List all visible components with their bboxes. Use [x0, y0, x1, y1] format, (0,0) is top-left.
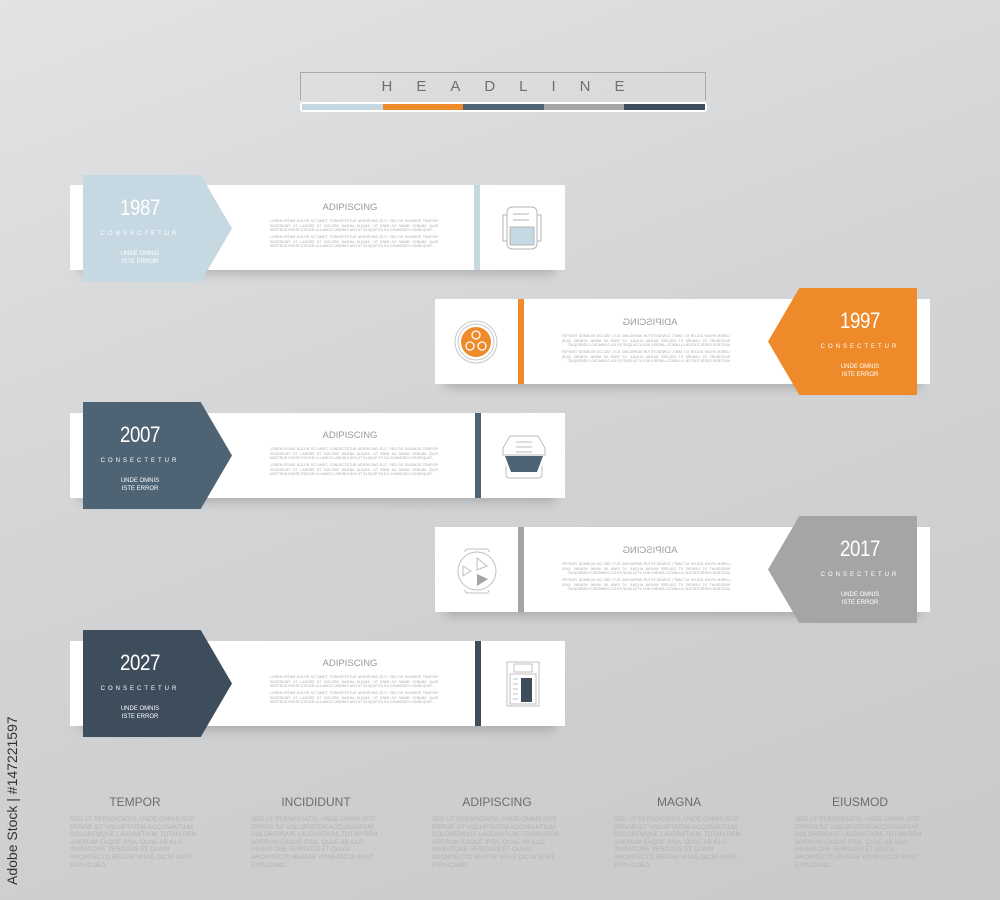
- tag 1997: UNDE OMNIS: [841, 364, 879, 370]
- text block mirrored: LOREM IPSUM DOLOR SIT AMET, CONSECTETUR ADIPISCING ELIT, SED DO EIUSMOD TEMPOR INCIDIDUNT UT LABORE ET DOLORE MAGNA ALIQUA. UT ENIM AD MINIM VENIAM, QUIS NOSTRUD EXERCITATION ULLAMCO LABORIS NISI UT ALIQUIP EX EA COMMODO CONSEQUAT.: [562, 334, 730, 347]
- tag 2007: [83, 402, 232, 509]
- bottom column: INCIDIDUNT: INCIDIDUNT: [281, 795, 351, 809]
- bottom column: ADIPISCING: ADIPISCING: [462, 795, 532, 809]
- tag 2027: [83, 630, 232, 737]
- text block mirrored: LOREM IPSUM DOLOR SIT AMET, CONSECTETUR ADIPISCING ELIT, SED DO EIUSMOD TEMPOR INCIDIDUNT UT LABORE ET DOLORE MAGNA ALIQUA. UT ENIM AD MINIM VENIAM, QUIS NOSTRUD EXERCITATION ULLAMCO LABORIS NISI UT ALIQUIP EX EA COMMODO CONSEQUAT.: [562, 578, 730, 591]
- text block mirrored: LOREM IPSUM DOLOR SIT AMET, CONSECTETUR ADIPISCING ELIT, SED DO EIUSMOD TEMPOR INCIDIDUNT UT LABORE ET DOLORE MAGNA ALIQUA. UT ENIM AD MINIM VENIAM, QUIS NOSTRUD EXERCITATION ULLAMCO LABORIS NISI UT ALIQUIP EX EA COMMODO CONSEQUAT.: [562, 562, 730, 575]
- tag 1987: UNDE OMNIS: [121, 251, 159, 257]
- tag 1997: [768, 288, 917, 395]
- icon: printer: [502, 206, 542, 250]
- bottom column: ADIPISCING: SED UT PERSPICIATIS, UNDE OMNIS ISTE ERROR SIT VOLUPTATEM ACCUSANTIUM DOLOREMQUE LAUDANTIUM, TOTAM REM APERIAM EAQUE IPSA, QUAE AB ILLO INVENTORE VERITATIS ET QUASI ARCHITECTO BEATAE VITAE DICTA SUNT, EXPLICABO.: [432, 816, 559, 869]
- icon: box: [502, 436, 546, 478]
- tag 2007: UNDE OMNIS: [121, 478, 159, 484]
- text block: ADIPISCING: [323, 658, 377, 669]
- text block: [270, 430, 438, 476]
- row 2017: [435, 516, 930, 623]
- headline: [300, 72, 707, 112]
- tag 1987: [83, 175, 232, 282]
- row 2027: [70, 630, 565, 737]
- bottom column: TEMPOR: TEMPOR: [109, 795, 161, 809]
- text block: LOREM IPSUM DOLOR SIT AMET, CONSECTETUR ADIPISCING ELIT, SED DO EIUSMOD TEMPOR INCIDIDUNT UT LABORE ET DOLORE MAGNA ALIQUA. UT ENIM AD MINIM VENIAM, QUIS NOSTRUD EXERCITATION ULLAMCO LABORIS NISI UT ALIQUIP EX EA COMMODO CONSEQUAT.: [270, 691, 438, 704]
- text block: ADIPISCING: [323, 430, 377, 441]
- text block: LOREM IPSUM DOLOR SIT AMET, CONSECTETUR ADIPISCING ELIT, SED DO EIUSMOD TEMPOR INCIDIDUNT UT LABORE ET DOLORE MAGNA ALIQUA. UT ENIM AD MINIM VENIAM, QUIS NOSTRUD EXERCITATION ULLAMCO LABORIS NISI UT ALIQUIP EX EA COMMODO CONSEQUAT.: [270, 219, 438, 232]
- bottom column: MAGNA: SED UT PERSPICIATIS, UNDE OMNIS ISTE ERROR SIT VOLUPTATEM ACCUSANTIUM DOLOREMQUE LAUDANTIUM, TOTAM REM APERIAM EAQUE IPSA, QUAE AB ILLO INVENTORE VERITATIS ET QUASI ARCHITECTO BEATAE VITAE DICTA SUNT, EXPLICABO.: [614, 816, 741, 869]
- text block: LOREM IPSUM DOLOR SIT AMET, CONSECTETUR ADIPISCING ELIT, SED DO EIUSMOD TEMPOR INCIDIDUNT UT LABORE ET DOLORE MAGNA ALIQUA. UT ENIM AD MINIM VENIAM, QUIS NOSTRUD EXERCITATION ULLAMCO LABORIS NISI UT ALIQUIP EX EA COMMODO CONSEQUAT.: [270, 235, 438, 248]
- bottom column: MAGNA: MAGNA: [657, 795, 701, 809]
- tag 2017: UNDE OMNIS: [841, 592, 879, 598]
- icon: clock pie: [458, 548, 496, 594]
- bottom column: EIUSMOD: EIUSMOD: [832, 795, 888, 809]
- watermark id: Adobe Stock | #147221597: [4, 716, 20, 885]
- text block mirrored: ADIPISCING: [623, 317, 677, 328]
- bottom column: EIUSMOD: SED UT PERSPICIATIS, UNDE OMNIS ISTE ERROR SIT VOLUPTATEM ACCUSANTIUM DOLOREMQUE LAUDANTIUM, TOTAM REM APERIAM EAQUE IPSA, QUAE AB ILLO INVENTORE VERITATIS ET QUASI ARCHITECTO BEATAE VITAE DICTA SUNT, EXPLICABO.: [795, 816, 922, 869]
- tag 2027: ISTE ERROR: [122, 714, 158, 720]
- tag 2027: 2027: [120, 650, 160, 675]
- text block: ADIPISCING: [323, 202, 377, 213]
- tag 2007: 2007: [120, 422, 160, 447]
- row 2007: [70, 402, 565, 509]
- text block: [270, 658, 438, 704]
- tag 1987: 1987: [120, 195, 160, 220]
- headline text: HEADLINE: [381, 78, 649, 95]
- bottom column: TEMPOR: SED UT PERSPICIATIS, UNDE OMNIS ISTE ERROR SIT VOLUPTATEM ACCUSANTIUM DOLOREMQUE LAUDANTIUM, TOTAM REM APERIAM EAQUE IPSA, QUAE AB ILLO INVENTORE VERITATIS ET QUASI ARCHITECTO BEATAE VITAE DICTA SUNT, EXPLICABO.: [70, 816, 197, 869]
- tag 2007: CONSECTETUR: [101, 458, 179, 464]
- tag 2027: UNDE OMNIS: [121, 706, 159, 712]
- row 1987: [70, 175, 565, 282]
- bottom column: INCIDIDUNT: SED UT PERSPICIATIS, UNDE OMNIS ISTE ERROR SIT VOLUPTATEM ACCUSANTIUM DOLOREMQUE LAUDANTIUM, TOTAM REM APERIAM EAQUE IPSA, QUAE AB ILLO INVENTORE VERITATIS ET QUASI ARCHITECTO BEATAE VITAE DICTA SUNT, EXPLICABO.: [251, 816, 378, 869]
- tag 1997: CONSECTETUR: [821, 344, 899, 350]
- row 1997: [435, 288, 930, 395]
- tag 1987: CONSECTETUR: [101, 231, 179, 237]
- tag 2007: ISTE ERROR: [122, 486, 158, 492]
- tag 2017: ISTE ERROR: [842, 600, 878, 606]
- text block: LOREM IPSUM DOLOR SIT AMET, CONSECTETUR ADIPISCING ELIT, SED DO EIUSMOD TEMPOR INCIDIDUNT UT LABORE ET DOLORE MAGNA ALIQUA. UT ENIM AD MINIM VENIAM, QUIS NOSTRUD EXERCITATION ULLAMCO LABORIS NISI UT ALIQUIP EX EA COMMODO CONSEQUAT.: [270, 447, 438, 460]
- tag 2017: CONSECTETUR: [821, 572, 899, 578]
- text block mirrored: LOREM IPSUM DOLOR SIT AMET, CONSECTETUR ADIPISCING ELIT, SED DO EIUSMOD TEMPOR INCIDIDUNT UT LABORE ET DOLORE MAGNA ALIQUA. UT ENIM AD MINIM VENIAM, QUIS NOSTRUD EXERCITATION ULLAMCO LABORIS NISI UT ALIQUIP EX EA COMMODO CONSEQUAT.: [562, 350, 730, 363]
- tag 1997: 1997: [840, 308, 880, 333]
- color bar: [300, 102, 707, 112]
- tag 1997: ISTE ERROR: [842, 372, 878, 378]
- text block: LOREM IPSUM DOLOR SIT AMET, CONSECTETUR ADIPISCING ELIT, SED DO EIUSMOD TEMPOR INCIDIDUNT UT LABORE ET DOLORE MAGNA ALIQUA. UT ENIM AD MINIM VENIAM, QUIS NOSTRUD EXERCITATION ULLAMCO LABORIS NISI UT ALIQUIP EX EA COMMODO CONSEQUAT.: [270, 463, 438, 476]
- tag 2017: 2017: [840, 536, 880, 561]
- tag 1987: ISTE ERROR: [122, 259, 158, 265]
- tag 2027: CONSECTETUR: [101, 686, 179, 692]
- icon: document: [506, 662, 540, 706]
- text block: [270, 202, 438, 248]
- text block: LOREM IPSUM DOLOR SIT AMET, CONSECTETUR ADIPISCING ELIT, SED DO EIUSMOD TEMPOR INCIDIDUNT UT LABORE ET DOLORE MAGNA ALIQUA. UT ENIM AD MINIM VENIAM, QUIS NOSTRUD EXERCITATION ULLAMCO LABORIS NISI UT ALIQUIP EX EA COMMODO CONSEQUAT.: [270, 675, 438, 688]
- text block mirrored: [562, 545, 730, 591]
- text block mirrored: [562, 317, 730, 363]
- tag 2017: [768, 516, 917, 623]
- icon: circle with dots: [454, 320, 498, 364]
- text block mirrored: ADIPISCING: [623, 545, 677, 556]
